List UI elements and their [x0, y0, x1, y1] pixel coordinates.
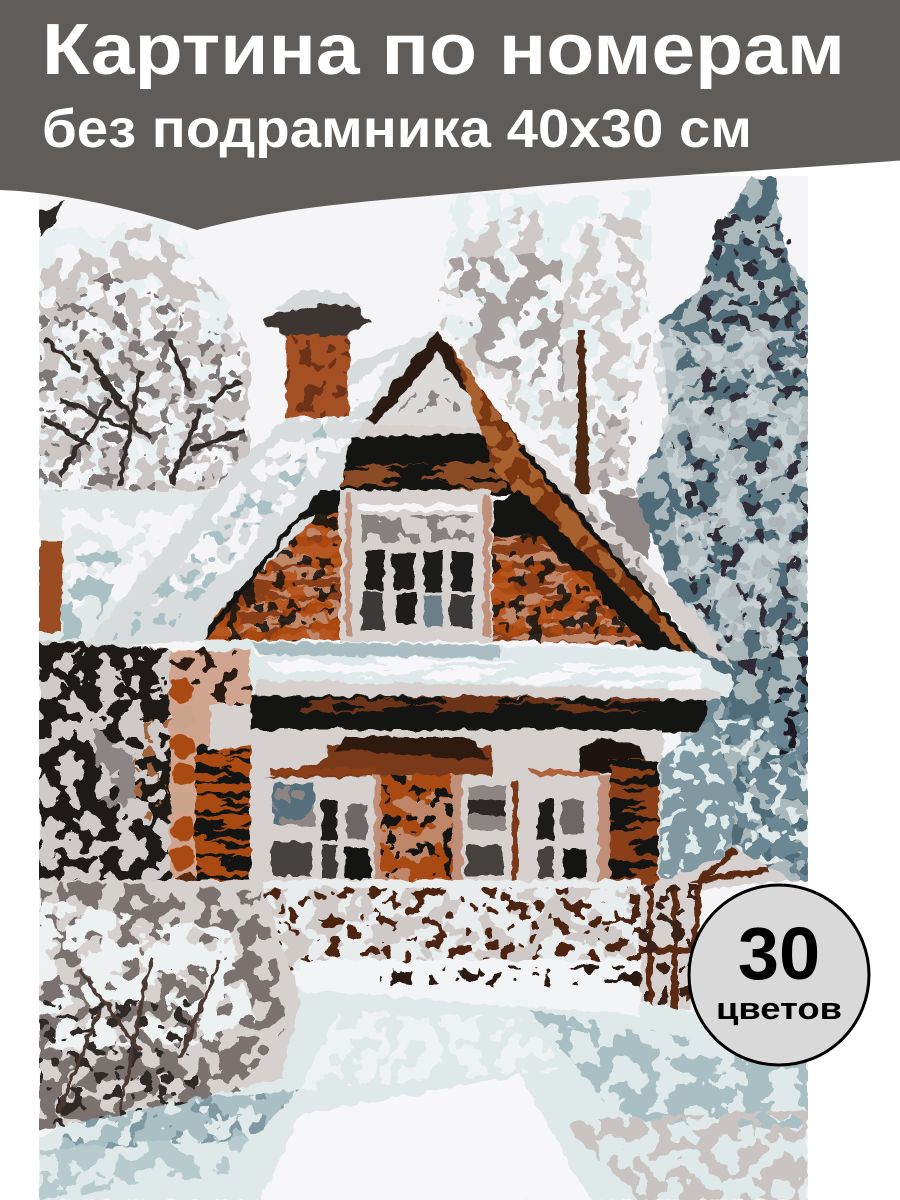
- badge: 30 colours: цветов: [716, 991, 842, 1026]
- log corner of house: [168, 646, 252, 882]
- header banner: [0, 0, 900, 230]
- right blue spruce lower part: [660, 720, 740, 880]
- right fence: [640, 850, 790, 1010]
- badge: 30 colours: [689, 885, 869, 1065]
- badge: 30 colours: 30: [738, 912, 820, 995]
- snow ground: [39, 960, 808, 1200]
- snowy bush bottom left: [39, 880, 300, 1130]
- porch window right: [462, 778, 590, 880]
- log ends: [170, 678, 198, 898]
- dormer panes: [362, 550, 472, 630]
- porch window left: [268, 778, 374, 880]
- title: Картина по номерам: [42, 10, 845, 90]
- subtitle: без подрамника 40х30 см: [42, 99, 752, 159]
- upper wall left: [205, 490, 345, 642]
- chimney with snow cap: [262, 290, 370, 417]
- porch wall: [248, 730, 663, 890]
- upper wall right: [490, 490, 690, 657]
- background trees left: [39, 200, 250, 500]
- dormer window: [340, 490, 492, 642]
- left low roof with snow: [39, 488, 214, 644]
- right roof eave band: [450, 345, 735, 670]
- snow ledge over porch: [205, 640, 735, 700]
- background birch trees centre: [440, 190, 650, 560]
- dark porch beam: [240, 695, 708, 735]
- porch railing: [262, 880, 642, 970]
- main roof snow slope: [80, 330, 437, 650]
- spruce tree right: [635, 178, 808, 880]
- gable top: [340, 330, 522, 495]
- dark side extension: [39, 640, 170, 880]
- painting: snowy wooden house: [39, 176, 808, 1200]
